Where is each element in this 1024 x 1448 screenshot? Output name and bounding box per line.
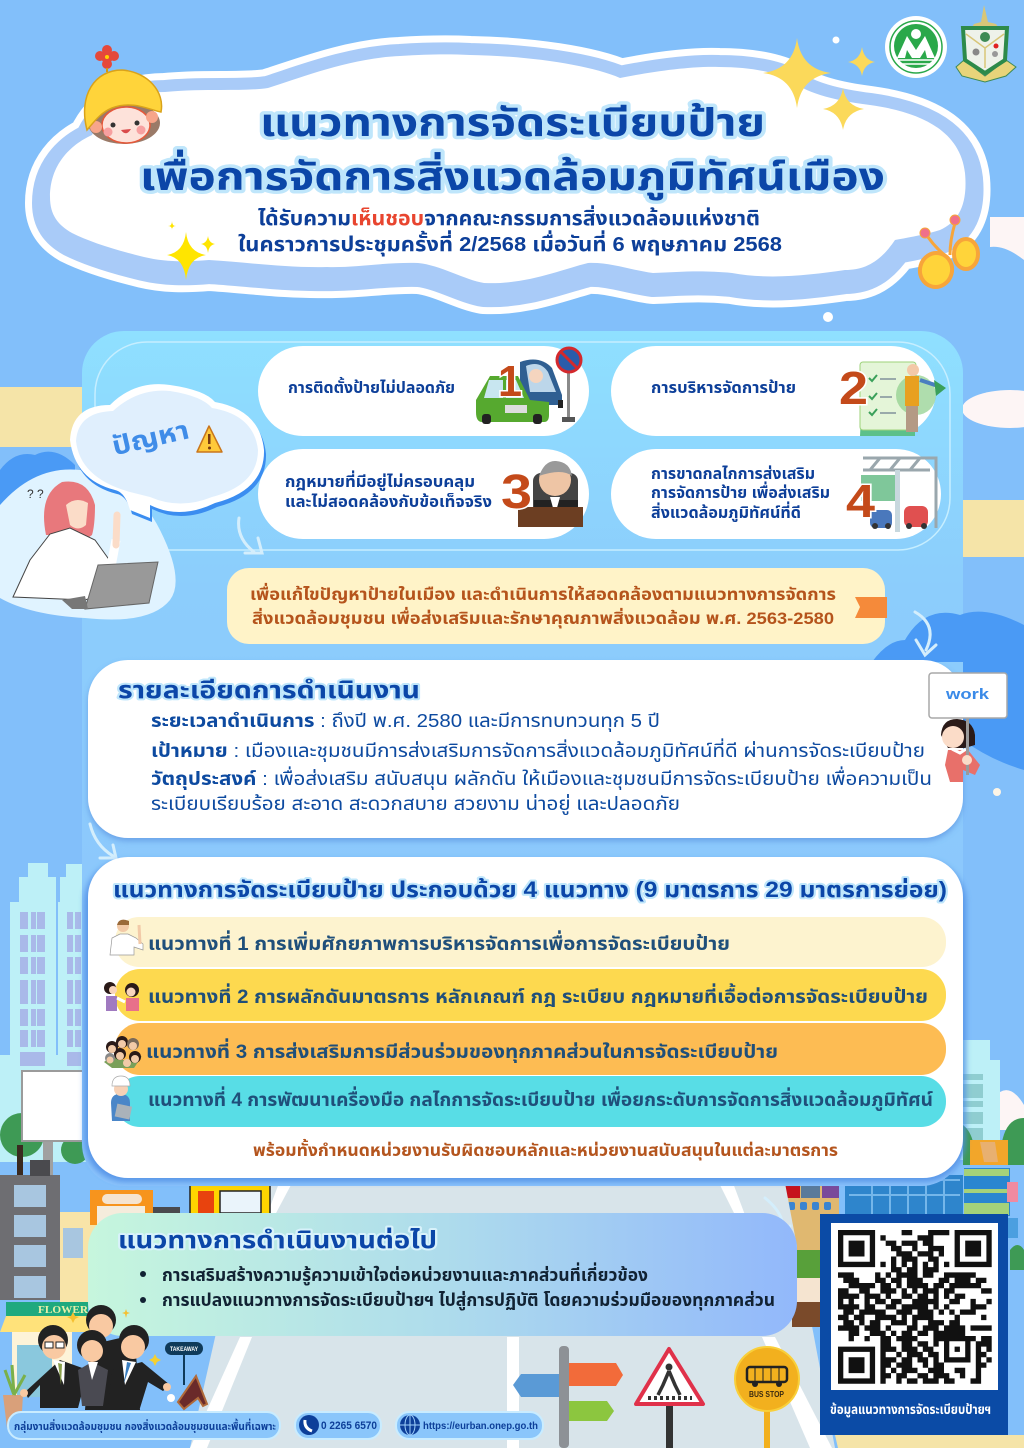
heading: problem: ปัญหา <box>109 414 192 461</box>
panel: four guidelines <box>84 857 966 1182</box>
icon: woman holding work sign <box>929 673 1007 782</box>
scenery: right city buildings <box>780 1040 1024 1270</box>
icon: takeaway signboard: TAKEAWAY <box>170 1346 199 1353</box>
icon: judge <box>501 461 583 527</box>
bullets: การแปลงแนวทางการจัดระเบียบป้ายฯ ไปสู่การปฏิบัติ โดยความร่วมมือของทุกภาคส่วน <box>162 1290 775 1311</box>
title line 2: เพื่อการจัดการสิ่งแวดล้อมภูมิทัศน์เมือง <box>140 149 885 200</box>
title cloud <box>50 54 966 289</box>
icon: judge: 3 <box>501 466 532 519</box>
solution banner <box>227 568 887 644</box>
guideline 2: แนวทางที่ 2 การผลักดันมาตรการ หลักเกณฑ์ กฎ ระเบียบ กฎหมายที่เอื้อต่อการจัดระเบียบป้าย <box>148 983 928 1008</box>
heading: guidelines: แนวทางการจัดระเบียบป้าย ประกอบด้วย 4 แนวทาง (9 มาตรการ 29 มาตรการย่อย) <box>113 877 947 902</box>
guideline 4 <box>115 1076 946 1127</box>
problem 4 pill: การขาดกลไกการส่งเสริม <box>651 465 815 483</box>
scenery: left city buildings <box>0 863 92 1180</box>
footer note: พร้อมทั้งกำหนดหน่วยงานรับผิดชอบหลักและหน่วยงานสนับสนุนในแต่ละมาตรการ <box>253 1139 838 1161</box>
scenery: right blue cloud <box>872 612 1024 796</box>
subtitle: ได้รับความ เห็นชอบจากคณะกรรมการสิ่งแวดล้อมแห่งชาติ <box>258 205 760 230</box>
arrow: problems to solution <box>239 518 262 553</box>
icon: two women <box>104 982 139 1011</box>
scenery: right side market <box>792 1215 827 1327</box>
ribbon <box>855 597 887 618</box>
QR code modules <box>838 1230 992 1384</box>
icon: checklist with officer: 2 <box>839 362 868 414</box>
footer: agency pill: กลุ่มงานสิ่งแวดล้อมชุมชน กองสิ่งแวดล้อมชุมชนและพื้นที่เฉพาะ <box>14 1418 276 1433</box>
illustration: group of business people <box>20 1305 171 1410</box>
icon: man in white shirt <box>110 920 143 955</box>
panel: operation details <box>88 660 963 841</box>
footer: phone pill: 0 2265 6570 <box>321 1420 377 1432</box>
footer: website pill <box>396 1412 543 1439</box>
problem 4 pill: การจัดการป้าย เพื่อส่งเสริม <box>651 481 830 502</box>
icon: engineer with tablet <box>111 1076 132 1121</box>
icon: sparkle stars <box>167 36 875 322</box>
illustration: flower shop: FLOWER <box>38 1305 89 1316</box>
panel: operation details: วัตถุประสงค์ : เพื่อส่งเสริม สนับสนุน ผลักดัน ให้เมืองและชุมชนมีการจัดระเบียบป้าย เพื่อความเป็น <box>151 766 932 790</box>
problem 4 pill: สิ่งแวดล้อมภูมิทัศน์ที่ดี <box>651 501 801 523</box>
icon: gantry with cars: 4 <box>846 475 875 527</box>
subtitle <box>238 205 782 256</box>
footer: phone pill <box>295 1412 381 1439</box>
icon: checklist with officer <box>839 362 946 436</box>
problem 1 pill: การติดตั้งป้ายไม่ปลอดภัย <box>288 377 455 397</box>
icon: bus stop sign: BUS STOP <box>749 1390 785 1399</box>
icon: girl with yellow hat <box>85 45 162 144</box>
icon: crowd of people <box>104 1036 142 1068</box>
icon: gantry with cars <box>846 458 936 532</box>
solution banner: เพื่อแก้ไขปัญหาป้ายในเมือง และดำเนินการให้สอดคล้องตามแนวทางการจัดการ <box>250 582 836 604</box>
title <box>140 102 885 200</box>
panel: operation details: ระเบียบเรียบร้อย สะอาด สะดวกสบาย สวยงาม น่าอยู่ และปลอดภัย <box>151 793 680 816</box>
panel: operation details: เป้าหมาย : เมืองและชุมชนมีการส่งเสริมการจัดการสิ่งแวดล้อมภูมิทัศน์ที่ดี ผ่านการจัดระเบียบป้าย <box>151 738 925 763</box>
icon: warning <box>197 426 222 452</box>
guideline 3: แนวทางที่ 3 การส่งเสริมการมีส่วนร่วมของทุกภาคส่วนในการจัดระเบียบป้าย <box>146 1038 778 1063</box>
guideline 4: แนวทางที่ 4 การพัฒนาเครื่องมือ กลไกการจัดระเบียบป้าย เพื่อยกระดับการจัดการสิ่งแวดล้อมภูมิทัศน์ <box>148 1086 933 1111</box>
logo: province crest <box>956 5 1016 82</box>
footer: website pill: https://eurban.onep.go.th <box>423 1420 538 1432</box>
logo: ONEP <box>885 16 947 78</box>
problem 3 pill <box>258 449 589 539</box>
icon: street direction signs <box>513 1346 623 1448</box>
panel: next steps <box>88 1213 797 1336</box>
icon: bus stop sign <box>735 1347 799 1448</box>
guideline 3 <box>115 1023 946 1075</box>
problem 3 pill: และไม่สอดคล้องกับข้อเท็จจริง <box>285 493 492 511</box>
icon: logos <box>885 5 1016 82</box>
guideline 2 <box>115 969 946 1021</box>
arrow: to details <box>915 612 936 655</box>
icon: pedestrian crossing sign <box>636 1349 703 1448</box>
speech cloud: ปัญหา <box>70 384 266 522</box>
panel: QR code <box>820 1214 1008 1435</box>
panel: woman with laptop bubble <box>0 469 176 620</box>
problem 2 pill <box>611 346 946 436</box>
arrow: to guidelines <box>90 824 116 858</box>
bullets: การเสริมสร้างความรู้ความเข้าใจต่อหน่วยงานและภาคส่วนที่เกี่ยวข้อง <box>162 1262 648 1286</box>
problem 3 pill: กฎหมายที่มีอยู่ไม่ครอบคลุม <box>285 470 475 492</box>
subtitle: ในคราวการประชุมครั้งที่ 2/2568 เมื่อวันที่ 6 พฤษภาคม 2568 <box>238 230 782 256</box>
solution banner: สิ่งแวดล้อมชุมชน เพื่อส่งเสริมและรักษาคุณภาพสิ่งแวดล้อม พ.ศ. 2563-2580 <box>252 606 834 628</box>
icon: takeaway signboard <box>165 1342 207 1409</box>
panel: woman with laptop bubble: ? ? <box>27 487 44 501</box>
heading: details: รายละเอียดการดำเนินงาน <box>118 677 420 704</box>
icon: cars and no-parking sign: 1 <box>498 357 522 406</box>
panel: problems and main backing <box>82 331 963 1186</box>
QR caption: ข้อมูลแนวทางการจัดระเบียบป้ายฯ <box>830 1402 991 1418</box>
title line 1: แนวทางการจัดระเบียบป้าย <box>260 102 765 145</box>
guideline 1 <box>115 917 946 967</box>
illustration: flower shop <box>0 1302 90 1428</box>
icon: cars and no-parking sign <box>476 348 581 424</box>
footer: agency pill <box>8 1412 280 1439</box>
problem 2 pill: การบริหารจัดการป้าย <box>651 379 796 397</box>
problem 4 pill <box>611 449 941 539</box>
problem 1 pill <box>258 346 589 436</box>
bullets <box>140 1262 775 1311</box>
scenery: lower left buildings and shops <box>0 1160 270 1302</box>
guideline 1: แนวทางที่ 1 การเพิ่มศักยภาพการบริหารจัดการเพื่อการจัดระเบียบป้าย <box>148 930 730 955</box>
panel: operation details: ระยะเวลาดำเนินการ : ถึงปี พ.ศ. 2580 และมีการทบทวนทุก 5 ปี <box>151 710 660 732</box>
arrow: to next steps <box>765 1198 790 1243</box>
icon: butterfly <box>916 215 978 291</box>
icon: woman holding work sign: work <box>945 686 990 703</box>
road <box>190 1183 1024 1448</box>
heading: next steps: แนวทางการดำเนินงานต่อไป <box>118 1226 437 1254</box>
